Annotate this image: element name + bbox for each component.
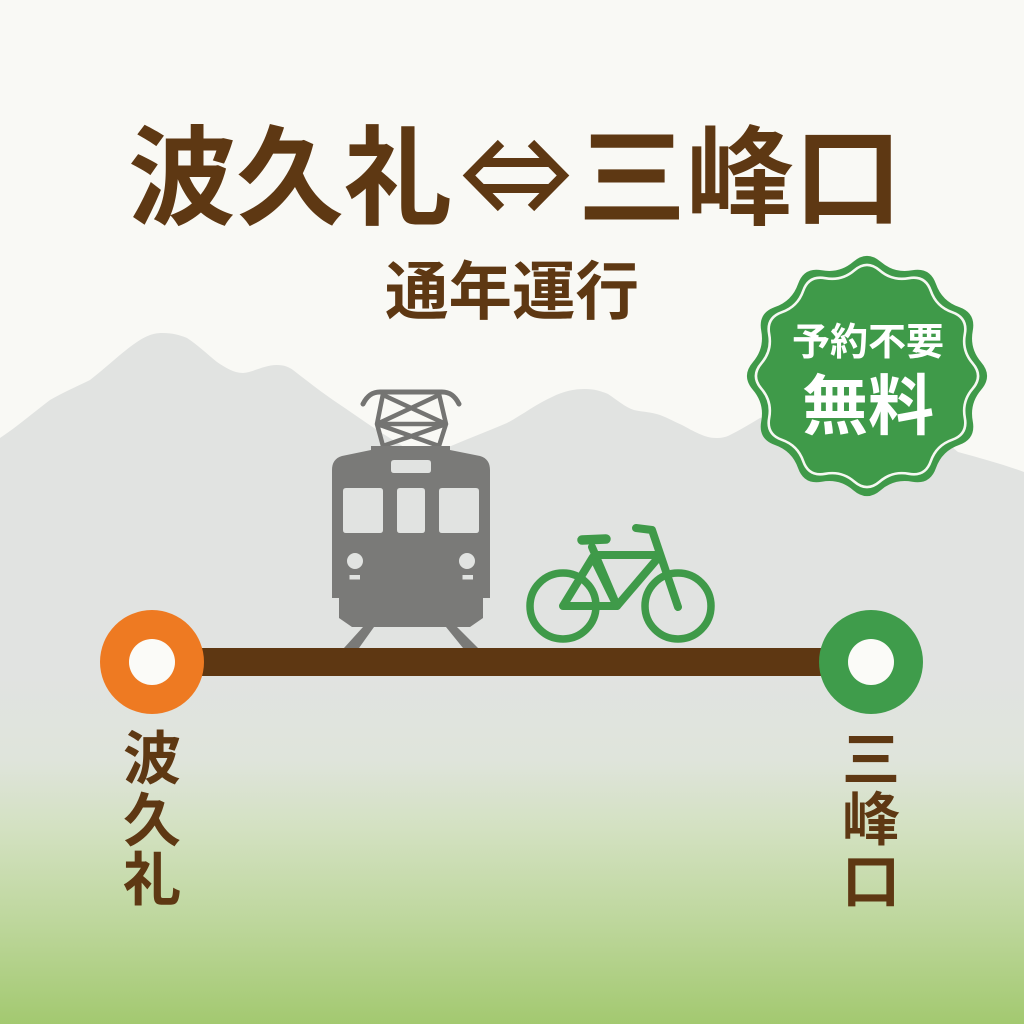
badge shape: [747, 256, 987, 496]
station marker: destination: [819, 610, 923, 714]
vertical label: origin station: 礼: [123, 848, 181, 913]
train pantograph: [363, 392, 459, 446]
icon: double arrow: [469, 143, 563, 208]
vertical label: origin station: 波: [123, 727, 181, 792]
title: destination station: 三峰口: [578, 118, 902, 239]
mountains with green foreground fade: [0, 333, 1024, 1024]
vertical label: origin station: 久: [123, 789, 181, 854]
icon: train: [332, 392, 490, 648]
vertical label: destination station: [842, 728, 900, 915]
badge text: free: 無料: [802, 369, 934, 443]
subtitle: 通年運行: [385, 258, 639, 328]
train legs: [344, 627, 478, 648]
vertical label: destination station: 三: [842, 728, 900, 793]
icon: bicycle: [530, 528, 711, 639]
route line: [200, 648, 824, 676]
badge inner outline: [756, 265, 978, 487]
badge: [747, 256, 987, 496]
station marker: origin: [100, 610, 204, 714]
vertical label: origin station: [123, 727, 181, 913]
title: [128, 118, 902, 239]
train body: [332, 446, 490, 627]
vertical label: destination station: 口: [842, 850, 900, 915]
vertical label: destination station: 峰: [842, 788, 900, 853]
badge text: no reservation: 予約不要: [792, 322, 944, 364]
title: origin station: 波久礼: [128, 118, 452, 239]
